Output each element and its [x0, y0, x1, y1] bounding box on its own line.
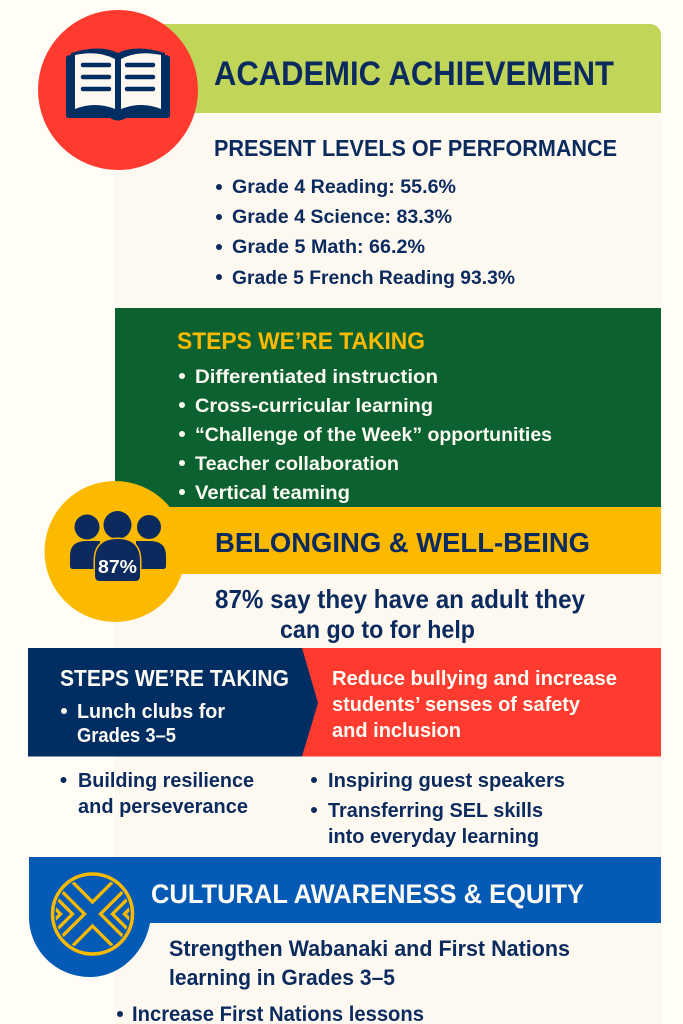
- heading band with rounded tab: [29, 857, 661, 977]
- text: strengthen learning: Strengthen Wabanaki and First Nations: [169, 936, 570, 961]
- list: performance levels: [216, 177, 515, 289]
- list: lunch clubs: [61, 701, 225, 747]
- goal text: Reduce bullying and increase: [332, 668, 617, 690]
- heading: academic achievement: ACADEMIC ACHIEVEMENT: [214, 55, 614, 93]
- goal text: students’ senses of safety: [332, 694, 581, 716]
- heading: cultural awareness and equity: CULTURAL AWARENESS & EQUITY: [151, 879, 584, 909]
- text: strengthen learning: [169, 936, 570, 990]
- list: academic steps: Vertical teaming: [195, 482, 350, 504]
- heading: steps we're taking: STEPS WE’RE TAKING: [60, 665, 289, 691]
- list: performance levels: Grade 4 Science: 83.3%: [232, 207, 452, 228]
- text: strengthen learning: learning in Grades 3–5: [169, 965, 395, 990]
- heading band: belonging: [165, 507, 661, 574]
- list: academic steps: Cross-curricular learning: [195, 395, 433, 417]
- list: performance levels: Grade 5 French Reading 93.3%: [232, 268, 515, 289]
- list: well-being left column: Building resilience: [78, 770, 254, 792]
- list: well-being right column: Transferring SEL skills: [328, 800, 543, 822]
- statement: 87% adult support: 87% say they have an adult they: [215, 584, 586, 614]
- list: well-being left column: [60, 770, 254, 818]
- panel: academic steps we're taking: [115, 308, 661, 507]
- heading band: academic achievement: [160, 24, 661, 113]
- panel: belonging and well-being: [44, 481, 661, 644]
- list: well-being right column: [311, 770, 565, 848]
- panel: page content background: [115, 113, 661, 1024]
- list: well-being right column: Inspiring guest speakers: [328, 770, 565, 792]
- list: academic steps: [179, 366, 552, 504]
- icon: woven X pattern: [50, 872, 134, 956]
- list: performance levels: Grade 5 Math: 66.2%: [232, 237, 425, 258]
- list: well-being right column: into everyday learning: [328, 826, 539, 848]
- goal text: [332, 668, 617, 742]
- list: well-being left column: and perseverance: [78, 796, 248, 818]
- list: academic steps: “Challenge of the Week” opportunities: [195, 424, 552, 446]
- list: lunch clubs: Lunch clubs for: [77, 701, 225, 723]
- heading: belonging and well-being: BELONGING & WELL-BEING: [215, 527, 590, 558]
- red goal arrow panel: [295, 648, 661, 756]
- icon: three people with 87%: 87%: [98, 556, 137, 577]
- heading: steps we're taking: STEPS WE’RE TAKING: [177, 328, 425, 355]
- panel: cultural awareness and equity: [20, 857, 661, 1024]
- icon: open book on red circle: [38, 10, 198, 170]
- panel: academic achievement: [38, 10, 661, 289]
- list: academic steps: Teacher collaboration: [195, 453, 399, 475]
- statement: 87% adult support: can go to for help: [280, 616, 475, 644]
- icon: three people with 87%: [44, 481, 186, 622]
- list: performance levels: Grade 4 Reading: 55.6%: [232, 177, 456, 198]
- list: academic steps: Differentiated instruction: [195, 366, 438, 388]
- navy steps panel: [28, 648, 318, 756]
- subheading: present levels of performance: PRESENT LEVELS OF PERFORMANCE: [214, 135, 617, 161]
- list: lunch clubs: Grades 3–5: [77, 725, 176, 747]
- statement: 87% adult support: [215, 584, 586, 644]
- panel: belonging steps and goal: [28, 648, 661, 756]
- goal text: and inclusion: [332, 720, 461, 742]
